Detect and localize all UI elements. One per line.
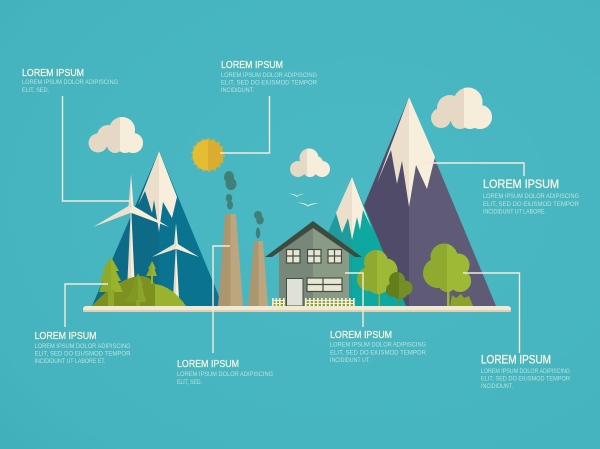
mountain: teal: [296, 177, 406, 306]
tree: small dark: [386, 272, 412, 306]
smoke: short chimney: [254, 211, 264, 238]
text block: bottom right: LOREM IPSUM DOLOR ADIPISCING: [481, 368, 570, 375]
chimney: tall: [218, 214, 243, 306]
cloud: top right: [431, 88, 492, 129]
tree: medium light: [357, 250, 398, 306]
text block: bottom centre left: [177, 359, 273, 386]
house walls: [279, 228, 349, 306]
pine tree: middle: [125, 273, 146, 306]
cloud: centre: [290, 148, 330, 177]
mountain snow cap: teal: [336, 177, 372, 240]
text block: bottom left: ELIT, SED DO EIUSMOD TEMPOR: [34, 350, 131, 358]
fence: right: [305, 298, 355, 306]
leader line: house label: [345, 273, 363, 327]
text block: bottom centre left: LOREM IPSUM DOLOR ADIPISCING: [177, 371, 273, 378]
text block: top centre: INCIDIDUNT.: [221, 87, 254, 94]
text block: top centre: LOREM IPSUM: [221, 60, 283, 71]
text block: bottom centre right: [330, 330, 426, 364]
house roof: [265, 221, 362, 257]
tree: large right: [423, 244, 471, 306]
text block: right: LOREM IPSUM DOLOR ADIPISCING: [483, 193, 579, 200]
text block: bottom right: INCIDIDUNT.: [481, 383, 513, 390]
mountain: left blue: [92, 151, 223, 306]
text block: bottom centre right: LOREM IPSUM: [330, 330, 392, 341]
sun: [192, 139, 224, 171]
text block: top centre: LOREM IPSUM DOLOR ADIPISCING: [221, 72, 317, 79]
bush: [450, 294, 473, 306]
wind turbine: large: [93, 174, 169, 290]
text block: top centre: [221, 60, 317, 94]
text block: top left: LOREM IPSUM: [22, 68, 84, 79]
birds: [288, 194, 319, 206]
text block: bottom centre right: INCIDIDUNT UT.: [330, 357, 370, 364]
cloud: left: [88, 117, 143, 153]
chimney: short: [248, 241, 268, 306]
leader line: pine label: [65, 284, 108, 327]
leader line: mountain label: [425, 163, 524, 176]
mountain: large purple: [322, 97, 496, 306]
text block: top centre: ELIT, SED DO EIUSMOD TEMPOR: [221, 80, 317, 86]
text block: top left: ELIT, SED.: [22, 87, 49, 94]
text block: bottom left: INCIDIDUNT UT LABORE ET.: [34, 358, 106, 365]
house door: [286, 278, 303, 306]
pine tree: small: [146, 261, 157, 284]
grass behind fence: [273, 300, 353, 306]
mountain snow cap: large: [377, 97, 435, 207]
house windows: [286, 250, 342, 292]
text block: right: ELIT, SED DO EIUSMOD TEMPOR: [483, 201, 579, 208]
mountain snow cap: left: [138, 151, 177, 232]
smoke: tall chimney: [224, 171, 236, 210]
pine tree: left: [99, 257, 123, 306]
text block: bottom left: LOREM IPSUM: [34, 331, 96, 342]
text block: right: LOREM IPSUM: [483, 178, 559, 191]
text block: right: [483, 178, 579, 216]
leader line: sun label: [220, 96, 270, 153]
text block: top left: [22, 68, 118, 94]
text block: bottom centre right: ELIT, SED DO EIUSMOD TEMPOR: [330, 350, 426, 356]
leader line: chimney label: [213, 246, 230, 353]
ground bar: [83, 306, 511, 312]
text block: bottom right: [481, 354, 570, 390]
text block: bottom right: ELIT, SED DO EIUSMOD TEMPOR: [481, 376, 570, 382]
text block: bottom centre left: LOREM IPSUM: [177, 359, 239, 370]
house: [265, 221, 362, 306]
text block: bottom centre right: LOREM IPSUM DOLOR ADIPISCING: [330, 342, 426, 348]
text block: bottom centre left: ELIT, SED.: [177, 379, 202, 386]
text block: bottom right: LOREM IPSUM: [481, 354, 551, 366]
text block: bottom left: LOREM IPSUM DOLOR ADIPISCING: [34, 343, 130, 350]
text block: top left: LOREM IPSUM DOLOR ADIPISCING: [22, 79, 118, 86]
fence: left: [272, 298, 285, 306]
text block: right: INCIDIDUNT UT LABORE.: [483, 208, 546, 216]
wind turbine: small: [152, 223, 199, 298]
leader line: right tree label: [463, 273, 520, 353]
hill: [92, 276, 186, 306]
text block: bottom left: [34, 331, 131, 365]
leader line: top left label to turbine: [62, 96, 130, 201]
